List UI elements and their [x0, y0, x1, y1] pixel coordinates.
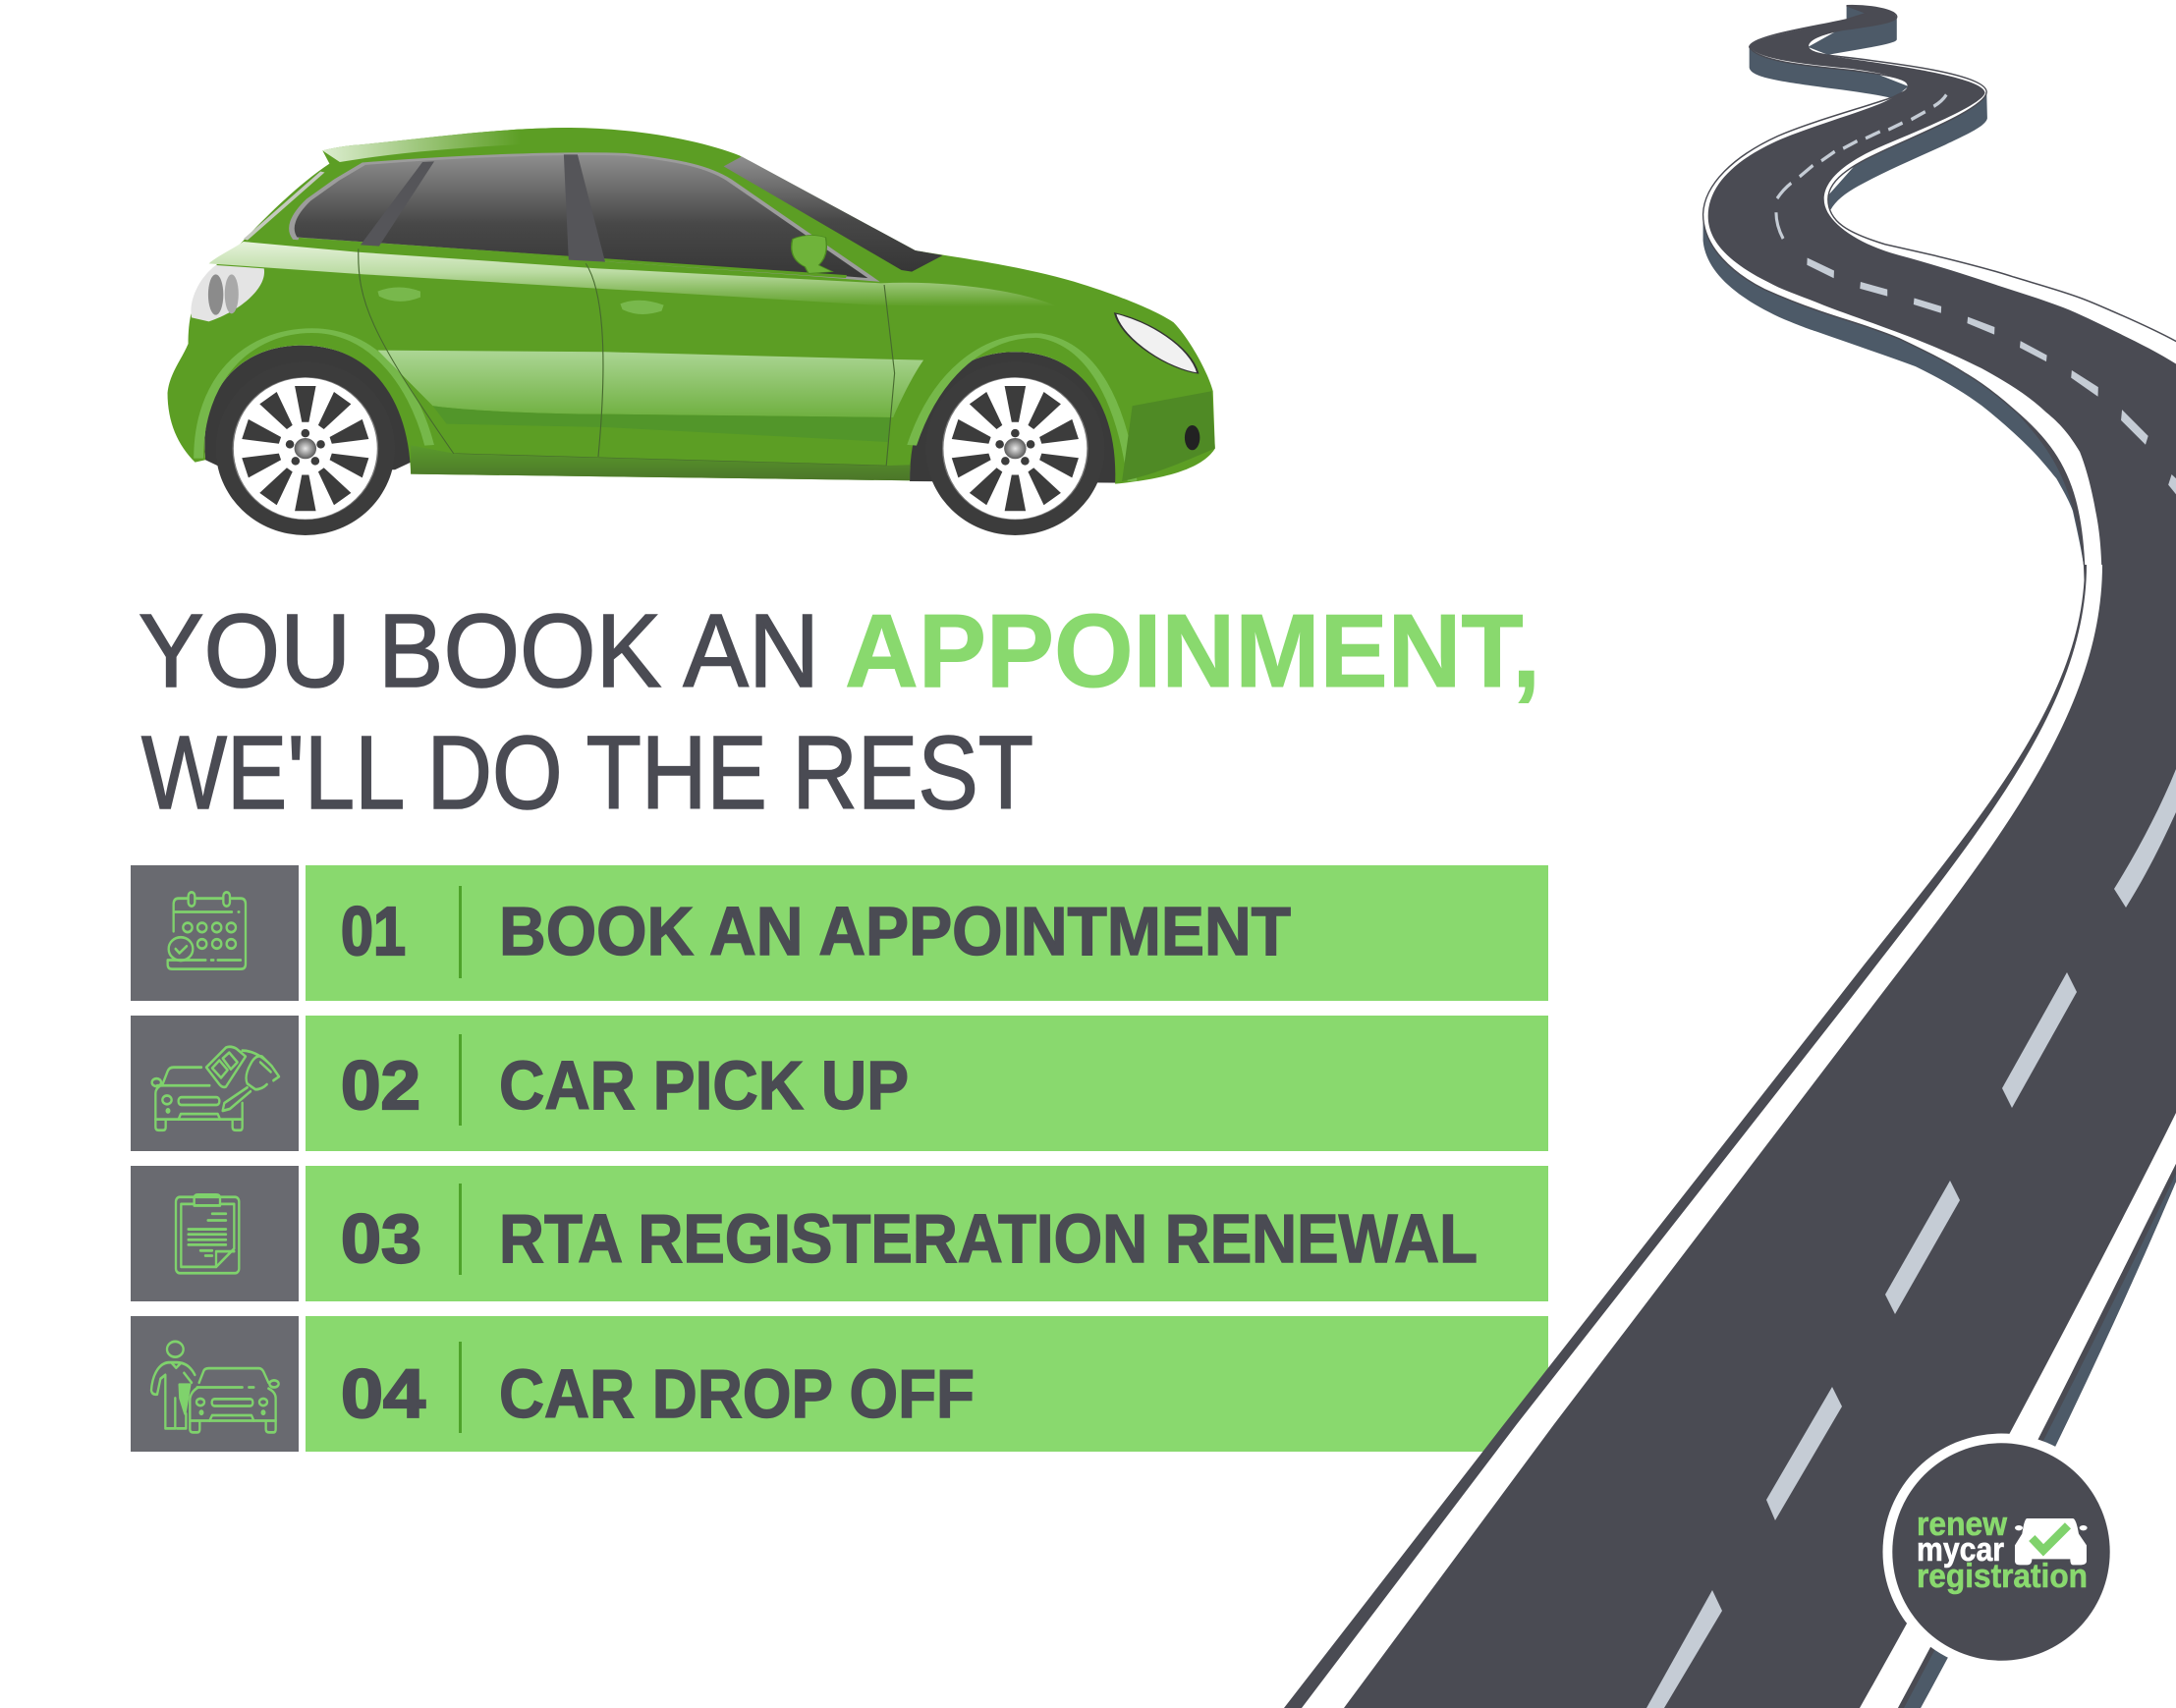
- icon: car and key: [152, 1047, 279, 1130]
- logo car and check icon: [2015, 1518, 2088, 1565]
- car: body: [168, 128, 1215, 484]
- car: headlight: [1115, 313, 1198, 373]
- car: door lines: [359, 248, 895, 466]
- car illustration: [168, 128, 1215, 535]
- step 3 row: [131, 1166, 1548, 1301]
- step 2 row: [131, 1016, 1548, 1151]
- logo badge: [1882, 1434, 2120, 1670]
- car: bumper: [1122, 391, 1215, 481]
- road: thin far centre dashes: [1776, 94, 1946, 239]
- step 3 label: RTA REGISTERATION RENEWAL: [499, 1200, 1478, 1277]
- step 1 row: [131, 865, 1548, 1001]
- car: belt highlight: [209, 242, 1060, 307]
- logo badge: mycar: [1917, 1531, 2004, 1569]
- car: front wheel: [925, 361, 1105, 535]
- car: mirror: [792, 236, 832, 273]
- heading: APPOINMENT,: [845, 593, 1540, 709]
- heading: [139, 593, 1540, 831]
- road: far winding section: [1703, 6, 2176, 589]
- car: side windows: [292, 154, 874, 280]
- road: near straight section: [1284, 565, 2176, 1708]
- car: sill: [411, 445, 910, 480]
- logo badge: registration: [1917, 1558, 2088, 1595]
- car: wheel arches: [204, 346, 1122, 483]
- car: roof highlight: [322, 128, 571, 162]
- step 4 label: CAR DROP OFF: [499, 1355, 975, 1432]
- steps list: [131, 865, 1548, 1452]
- step 4 row: [131, 1316, 1548, 1452]
- step 1 number: 01: [341, 893, 406, 969]
- car: windshield: [724, 156, 943, 272]
- car: rear wheel: [216, 361, 395, 535]
- heading: WE'LL DO THE REST: [141, 715, 1033, 831]
- road: wide near centre dashes: [1807, 258, 2176, 508]
- step 2 number: 02: [341, 1047, 420, 1124]
- step 2 label: CAR PICK UP: [499, 1047, 909, 1124]
- logo text: renew: [1917, 1506, 2008, 1543]
- step 4 number: 04: [341, 1355, 425, 1432]
- icon: calendar: [168, 892, 246, 969]
- road: [1284, 6, 2176, 1708]
- car: door handles: [377, 287, 664, 314]
- heading: YOU BOOK AN: [139, 593, 819, 709]
- car: tail light: [191, 265, 264, 321]
- car: lower door reflection: [377, 351, 923, 417]
- icon: clipboard document: [176, 1194, 239, 1273]
- icon: person and car: [151, 1342, 279, 1432]
- car: rear pillar trim: [246, 172, 322, 240]
- car: fender highlights: [198, 331, 1133, 481]
- step 3 number: 03: [341, 1200, 421, 1277]
- road: centre dashes: [1646, 769, 2176, 1708]
- step 1 label: BOOK AN APPOINTMENT: [499, 893, 1291, 969]
